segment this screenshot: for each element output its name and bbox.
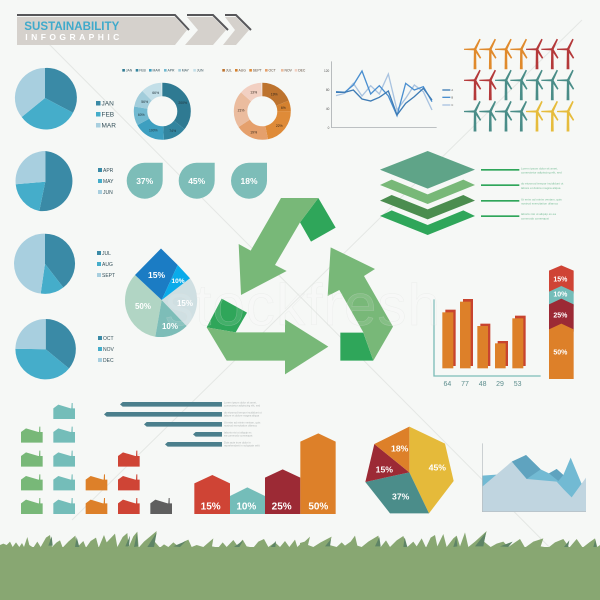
donut chart: Jan to Jun: 74% — [169, 129, 176, 133]
horizontal bars with captions: Lorem ipsum dolor sit amet, — [224, 401, 257, 405]
horizontal bars with captions: reprehenderit in voluptate velit — [224, 444, 260, 448]
horizontal bars with captions — [104, 401, 262, 448]
pie chart: Jan Feb Mar — [15, 68, 77, 129]
bar chart: 53 — [514, 381, 522, 388]
title banner: INFOGRAPHIC — [25, 32, 119, 42]
legend: Jul to Dec: SEPT — [253, 69, 262, 73]
stacked percentage column: 25% — [553, 313, 568, 320]
line chart: 120 — [324, 69, 330, 73]
donut chart: Jul to Dec — [238, 90, 286, 134]
legend: Jul to Dec — [222, 69, 306, 73]
legend: Jul to Dec: NOV — [284, 69, 293, 73]
donut chart: Jul to Dec: 13% — [250, 90, 257, 94]
stacked layers with captions: do eiusmod tempor incididunt ut — [521, 182, 563, 186]
horizontal bars with captions: do eiusmod tempor incididunt ut — [224, 411, 262, 415]
donut chart: Jan to Jun: 100% — [149, 128, 158, 132]
house-shaped bar chart — [194, 433, 336, 514]
bar chart: 48 — [479, 381, 487, 388]
horizontal bars with captions: labore et dolore magna aliqua — [224, 414, 260, 418]
legend: Apr May Jun: MAY — [103, 179, 114, 185]
horizontal bars with captions: Duis aute irure dolor in — [224, 441, 251, 445]
arrow: bottom — [207, 299, 328, 374]
horizontal bars with captions: nostrud exercitation ullamco — [224, 424, 258, 428]
horizontal bars with captions: laboris nisi ut aliquip ex — [224, 431, 252, 435]
teardrop 45% — [179, 163, 215, 199]
legend: Jul to Dec: JUL — [226, 69, 232, 73]
donut chart: Jul to Dec: 22% — [276, 124, 283, 128]
legend: Jan to Jun: JUN — [197, 69, 204, 73]
stacked percentage column: 15% — [553, 276, 568, 283]
legend: Jan to Jun: MAY — [182, 69, 190, 73]
legend: Jan to Jun — [122, 69, 204, 73]
teardrop 18%: 18% — [240, 176, 258, 186]
house-shaped bar chart: 15% — [201, 502, 221, 513]
heptagon pie chart: 15% — [376, 464, 393, 474]
donut chart: Jan to Jun — [138, 90, 187, 133]
line chart: 40 — [326, 107, 330, 111]
line chart: B — [451, 95, 453, 99]
bar chart: 29 — [496, 381, 504, 388]
legend: Jul Aug Sept — [97, 251, 115, 279]
legend: Oct Nov Dec: DEC — [103, 358, 114, 364]
bar chart — [434, 299, 541, 388]
arrow: right — [328, 247, 393, 361]
drop-shaped pie chart: 10% — [162, 322, 178, 331]
stacked layers with captions: consectetur adipiscing elit, sed — [521, 171, 562, 175]
teardrop 45%: 45% — [188, 176, 206, 186]
legend: Oct Nov Dec — [98, 336, 114, 364]
legend: Apr May Jun — [98, 168, 114, 196]
title banner: SUSTAINABILITY — [24, 21, 120, 33]
donut chart: Jul to Dec: 19% — [250, 130, 257, 134]
line chart: 80 — [326, 88, 330, 92]
donut chart: Jan to Jun: 66% — [152, 91, 159, 95]
horizontal bars with captions: consectetur adipiscing elit, sed — [224, 404, 261, 408]
horizontal bars with captions: Ut enim ad minim veniam, quis — [224, 421, 261, 425]
stacked layers with captions: Ut enim ad minim veniam, quis — [521, 197, 562, 201]
legend: Oct Nov Dec: NOV — [103, 347, 114, 353]
legend: Jan to Jun: MAR — [152, 69, 161, 73]
drop-shaped pie chart: 15% — [177, 299, 193, 308]
heptagon pie chart: 37% — [392, 492, 410, 502]
legend: Jan Feb Mar: MAR — [102, 122, 116, 130]
line chart — [324, 61, 453, 130]
teardrop 37% — [127, 163, 163, 199]
legend: Jul Aug Sept: JUL — [102, 251, 111, 257]
stacked layers with captions: laboris nisi ut aliquip ex ea — [521, 212, 556, 216]
watermark: stockfresh — [165, 273, 440, 338]
stacked layers with captions: commodo consequat — [521, 216, 549, 220]
legend: Jan to Jun: FEB — [139, 69, 147, 73]
title banner — [17, 15, 251, 45]
legend: Jul to Dec: DEC — [298, 69, 306, 73]
legend: Jul Aug Sept: SEPT — [102, 273, 115, 279]
stacked percentage column: 10% — [553, 292, 568, 299]
recycling symbol — [207, 198, 393, 374]
legend: Apr May Jun: JUN — [103, 190, 113, 196]
stacked layers with captions: Lorem ipsum dolor sit amet, — [521, 166, 558, 170]
stacked percentage column — [549, 265, 574, 379]
legend: Jan Feb Mar — [96, 100, 116, 130]
bar chart: 64 — [443, 381, 451, 388]
bar chart: 77 — [461, 381, 469, 388]
teardrop 18% — [231, 163, 267, 199]
drop-shaped pie chart: 15% — [148, 270, 165, 280]
teardrop 37%: 37% — [136, 176, 154, 186]
legend: Jul Aug Sept: AUG — [102, 262, 113, 268]
legend: Oct Nov Dec: OCT — [103, 336, 114, 342]
legend: Apr May Jun: APR — [103, 168, 114, 174]
heptagon pie chart — [365, 427, 454, 513]
heptagon pie chart: 45% — [429, 463, 446, 473]
line chart: C — [451, 103, 453, 107]
pie chart: Apr May Jun — [16, 151, 72, 211]
heptagon pie chart: 18% — [391, 444, 409, 454]
area chart — [482, 443, 586, 512]
legend: Jan to Jun: APR — [168, 69, 175, 73]
arrow: top — [239, 198, 336, 295]
stacked layers with captions: labore et dolore magna aliqua — [521, 186, 561, 190]
grass strip — [0, 531, 600, 600]
legend: Jan Feb Mar: FEB — [102, 112, 114, 118]
line chart: 0 — [328, 126, 330, 130]
drop-shaped pie chart — [125, 248, 197, 337]
legend: Jul to Dec: AUG — [238, 69, 246, 73]
drop-shaped pie chart: 50% — [135, 302, 151, 311]
pie chart: Oct Nov Dec — [15, 319, 76, 379]
stacked layers with captions — [380, 151, 563, 235]
stacked percentage column: 50% — [553, 349, 568, 356]
wind turbines grid — [464, 39, 574, 132]
donut chart: Jul to Dec: 21% — [238, 108, 244, 112]
house-shaped bar chart: 50% — [308, 502, 328, 513]
legend: Jan to Jun: JAN — [126, 69, 133, 73]
factory icon grid — [21, 403, 172, 514]
house-shaped bar chart: 25% — [272, 502, 292, 513]
horizontal bars with captions: ea commodo consequat — [224, 434, 253, 438]
drop-shaped pie chart: 10% — [171, 278, 185, 285]
donut chart: Jan to Jun: 60% — [138, 113, 145, 117]
pie chart: Jul Aug Sept — [14, 234, 75, 294]
donut chart: Jul to Dec: 6% — [281, 106, 286, 110]
legend: Jul to Dec: OCT — [268, 69, 276, 73]
house-shaped bar chart: 10% — [236, 502, 256, 513]
donut chart: Jan to Jun: 200% — [178, 101, 187, 105]
donut chart: Jan to Jun: 56% — [141, 100, 148, 104]
line chart: A — [451, 88, 453, 92]
stacked layers with captions: nostrud exercitation ullamco — [521, 201, 558, 205]
donut chart: Jul to Dec: 19% — [271, 92, 278, 96]
legend: Jan Feb Mar: JAN — [102, 100, 114, 108]
